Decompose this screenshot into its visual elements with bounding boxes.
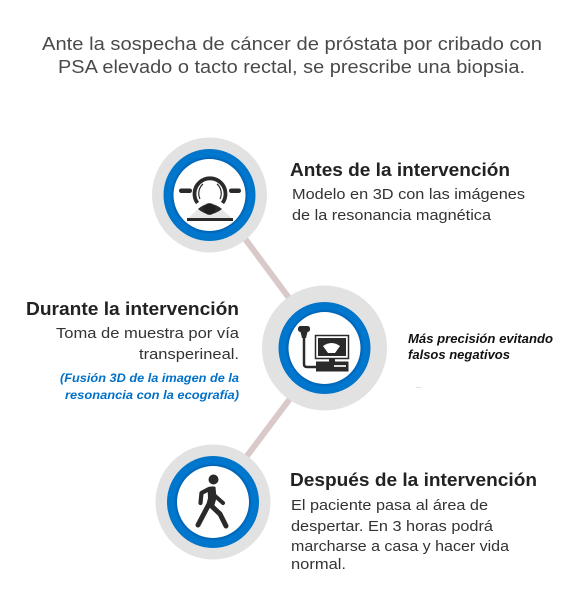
connector: step 2 to step 3	[244, 396, 292, 460]
callout: precision: falsos negativos	[408, 347, 510, 362]
callout: precision: Más precisión evitando	[408, 331, 553, 346]
title	[42, 34, 542, 77]
step 3 icon: walking person	[156, 444, 270, 560]
step 3 heading: Después de la intervención	[290, 470, 537, 490]
callout: precision	[408, 331, 553, 362]
step 1 description: de la resonancia magnética	[292, 207, 492, 224]
step 3 description	[291, 497, 510, 573]
step 2 description: Toma de muestra por vía	[56, 325, 240, 342]
step 3 description: El paciente pasa al área de	[291, 497, 488, 514]
step 2 note: image fusion: (Fusión 3D de la imagen de la	[60, 371, 239, 385]
step 1 description	[292, 186, 525, 224]
step 3 description: normal.	[291, 556, 346, 573]
step 1 icon: MRI scanner	[152, 138, 267, 252]
step 2 note: image fusion	[60, 371, 239, 402]
step 2 description	[56, 325, 240, 363]
connector: step 1 to step 2	[243, 236, 292, 302]
step 3 description: marcharse a casa y hacer vida	[291, 538, 510, 555]
step 1 description: Modelo en 3D con las imágenes	[292, 186, 525, 203]
step 1 heading: Antes de la intervención	[290, 160, 510, 180]
step 2 description: transperineal.	[139, 346, 239, 363]
title: PSA elevado o tacto rectal, se prescribe una biopsia.	[58, 57, 525, 77]
step 3 description: despertar. En 3 horas podrá	[291, 518, 494, 535]
step 2 note: image fusion: resonancia con la ecografía)	[65, 388, 239, 402]
title: Ante la sospecha de cáncer de próstata por cribado con	[42, 34, 542, 54]
step 2 icon: ultrasound machine	[262, 286, 387, 410]
step 2 heading: Durante la intervención	[26, 299, 239, 319]
faint dots: ...	[416, 383, 422, 390]
